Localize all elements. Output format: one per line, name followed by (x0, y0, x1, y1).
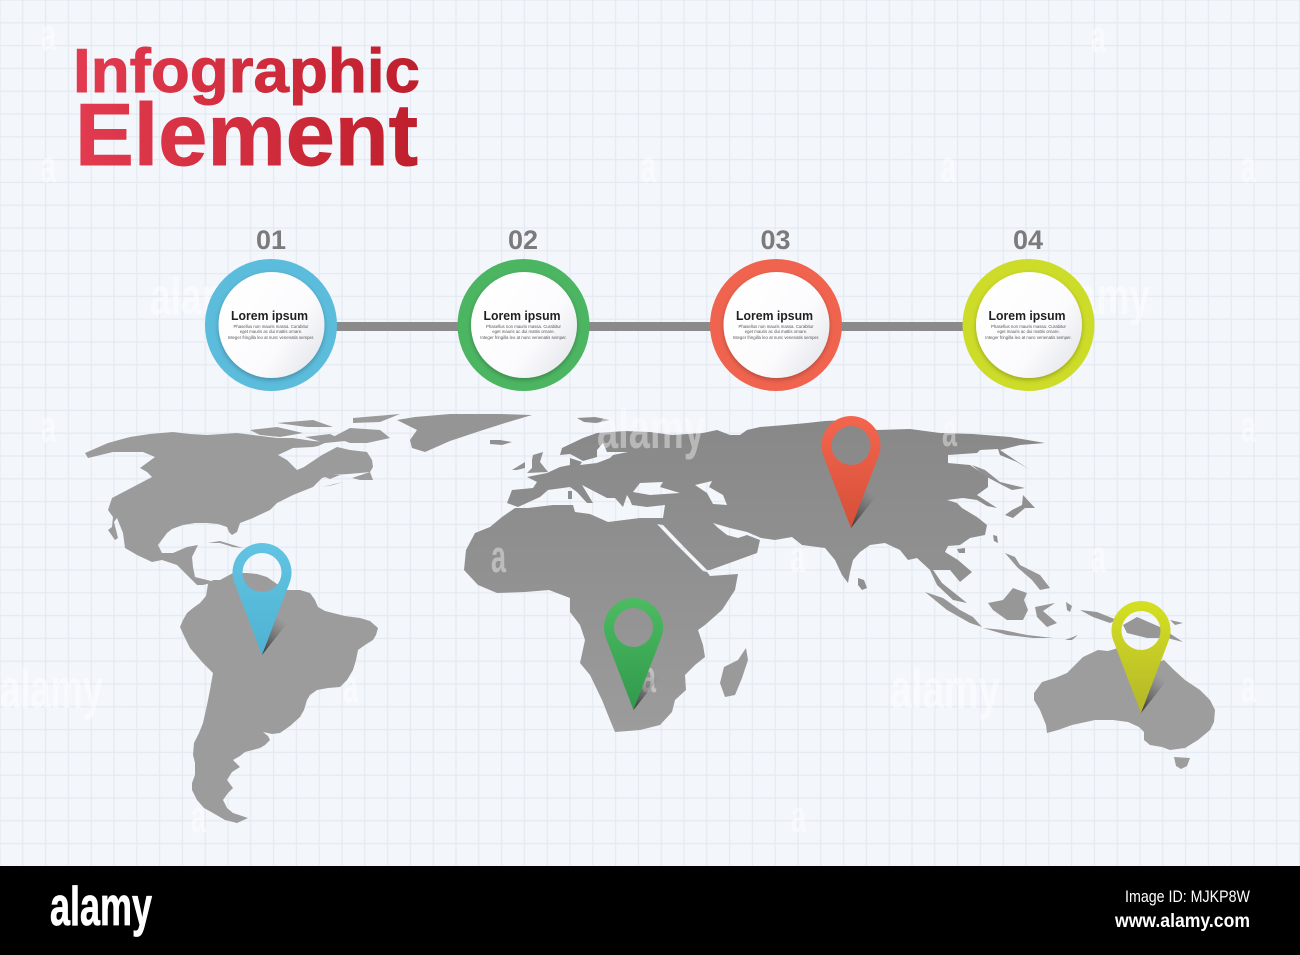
pin: green (604, 598, 663, 710)
faint watermarks: alamy (1045, 268, 1150, 326)
faint watermarks: alamy (0, 657, 103, 720)
tasmania (1174, 757, 1190, 769)
title: Element (75, 85, 418, 184)
title (73, 37, 420, 184)
faint watermarks: a (1091, 531, 1107, 582)
greenland (397, 414, 532, 452)
title: Infographic (73, 37, 420, 106)
faint watermarks: a (41, 141, 57, 192)
faint watermarks: a (41, 401, 57, 452)
step 01: Lorem ipsum (231, 308, 308, 323)
step 02: 02 (508, 225, 538, 255)
pin: blue (232, 543, 292, 655)
step 03: eget mauris ac dui mattis ornare. (745, 329, 807, 334)
australia (1034, 648, 1215, 750)
step 04: 04 (1013, 225, 1043, 255)
step 02 (458, 225, 590, 391)
madagascar (720, 648, 748, 697)
step 04: Lorem ipsum (988, 308, 1066, 323)
step 03 (710, 225, 842, 391)
step 03: Lorem ipsum (736, 308, 813, 323)
islands of southeast asia (925, 553, 1183, 642)
step 02: Integer fringilla leo at nunc venenatis semper. (480, 335, 567, 340)
footer logo: alamy (50, 875, 152, 937)
step 02: eget mauris ac dui mattis ornare. (492, 329, 555, 334)
step 02: Lorem ipsum (484, 308, 560, 323)
north america (85, 414, 400, 585)
watermark on map: a (942, 405, 958, 456)
website: www.alamy.com (1114, 911, 1250, 932)
footer bar (0, 866, 1300, 955)
world map (85, 397, 1215, 823)
step 01: eget mauris ac dui mattis ornare. (240, 329, 302, 334)
step 01: Phasellus non mauris massa. Curabitur (234, 324, 309, 329)
step 04 (962, 225, 1094, 391)
step 01: 01 (256, 225, 286, 255)
step 04: Integer fringilla leo at nunc venenatis semper. (985, 335, 1072, 340)
step 01: Integer fringilla leo at nunc venenatis semper. (228, 335, 314, 340)
pin: red (822, 416, 880, 528)
step 01 (205, 225, 337, 391)
faint watermarks: a (41, 9, 57, 60)
step 04: Phasellus non mauris massa. Curabitur (991, 324, 1067, 329)
islands of europe and asia (490, 417, 1035, 590)
step 02: Phasellus non mauris massa. Curabitur (486, 324, 562, 329)
watermark on map: a (491, 531, 507, 582)
faint watermarks: a (1241, 401, 1257, 452)
image id: Image ID: MJKP8W (1125, 887, 1250, 906)
faint watermarks: a (1091, 11, 1107, 62)
watermark on map: a (641, 651, 657, 702)
watermark on map (491, 397, 958, 702)
step 03: Phasellus non mauris massa. Curabitur (738, 324, 814, 329)
faint watermarks: a (941, 141, 957, 192)
faint watermarks: a (191, 791, 207, 842)
watermark on map: alamy (597, 397, 705, 460)
faint watermarks: a (791, 791, 807, 842)
faint watermarks: a (1241, 661, 1257, 712)
faint watermarks: a (790, 531, 806, 582)
faint watermarks: a (1241, 141, 1257, 192)
eurasia and africa (464, 420, 1045, 732)
pin: yellow (1112, 601, 1170, 713)
step 03: Integer fringilla leo at nunc venenatis semper. (733, 335, 819, 340)
faint watermarks: a (343, 661, 359, 712)
faint watermarks: alamy (890, 657, 1000, 720)
connector line between steps (330, 322, 970, 331)
step 04: eget mauris ac dui mattis ornare. (997, 329, 1060, 334)
step 03: 03 (760, 225, 791, 255)
faint watermarks: alamy (150, 268, 255, 326)
south america (180, 573, 378, 823)
faint watermarks: a (641, 141, 657, 192)
